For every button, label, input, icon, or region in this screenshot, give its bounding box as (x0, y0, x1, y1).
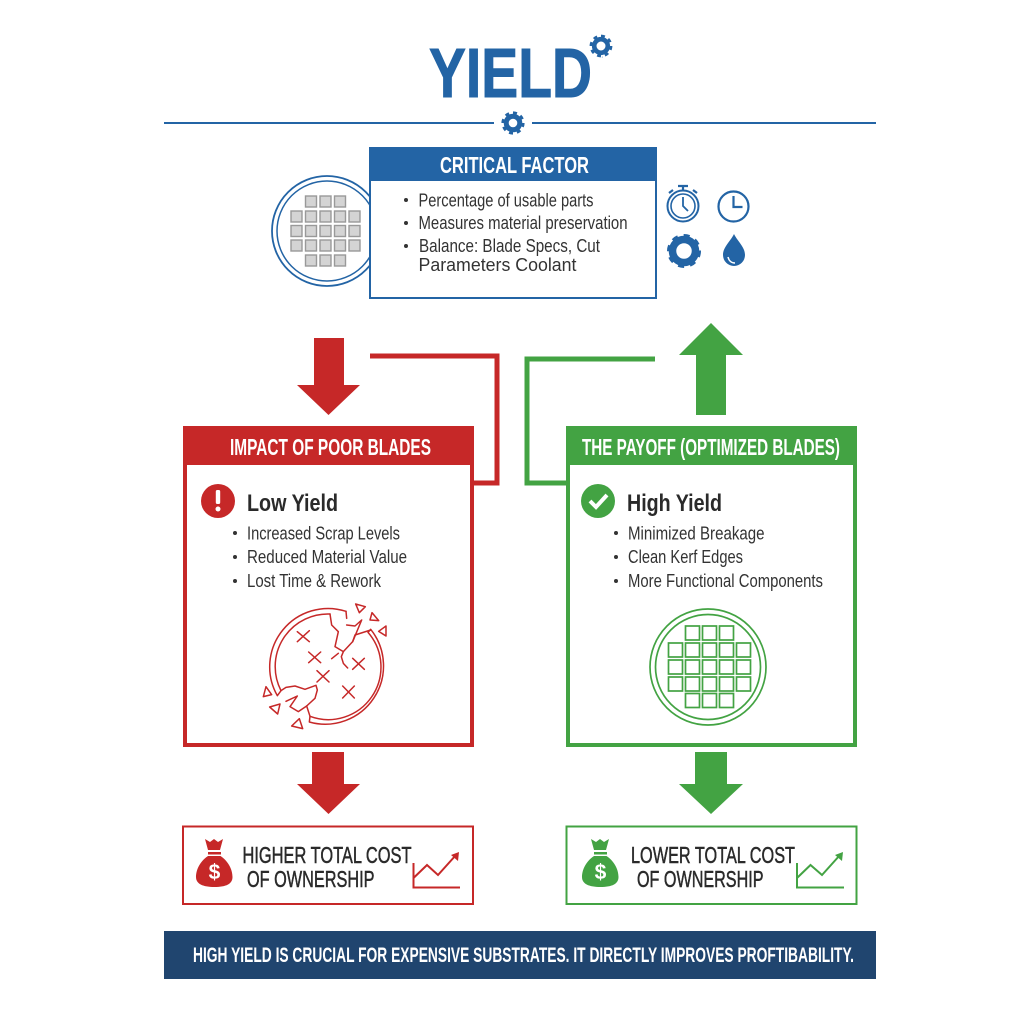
arrow: red down to left panel (297, 338, 360, 415)
text: higher total cost: HIGHER TOTAL COST (242, 842, 412, 868)
text: critical factor bullets: Percentage of usable parts (418, 190, 594, 210)
text: higher total cost (242, 842, 412, 892)
icon: red money bag: $ (209, 861, 221, 884)
icon: stopwatch (668, 186, 698, 222)
text: lower total cost: OF OWNERSHIP (637, 866, 764, 892)
title: YIELD: YIELD (429, 34, 592, 112)
icon: red money bag (196, 839, 232, 887)
arrow: green up from right panel (679, 323, 743, 415)
text: critical factor bullets: Balance: Blade Specs, Cut (419, 236, 600, 256)
icon: intact wafer (650, 609, 766, 725)
panel: critical factor (369, 147, 657, 298)
text: higher total cost: OF OWNERSHIP (247, 866, 374, 892)
text: low yield bullets: Increased Scrap Levels (247, 524, 400, 544)
text: low yield bullets: Reduced Material Value (247, 547, 407, 567)
icon: check (581, 484, 615, 518)
text: high yield bullets (614, 524, 823, 591)
icon: wafer with grey dies (272, 176, 382, 286)
subheading: high yield: High Yield (627, 490, 722, 517)
icon: green money bag: $ (595, 861, 607, 884)
panel: impact of poor blades (183, 426, 474, 745)
icon: title gear (591, 36, 611, 56)
icon: green money bag (582, 839, 618, 887)
arrow: red down to cost (297, 752, 360, 814)
panel: lower total cost (566, 826, 856, 904)
icon: broken wafer (263, 604, 386, 729)
text: critical factor bullets: Measures material preservation (418, 213, 628, 233)
icon: red trend chart (414, 852, 460, 888)
banner: conclusion (164, 931, 876, 979)
text: critical factor bullets (404, 190, 628, 275)
icon: green trend chart (797, 852, 844, 888)
connector: red line (370, 356, 497, 483)
panel: higher total cost (183, 826, 473, 904)
text: low yield bullets: Lost Time & Rework (247, 571, 382, 591)
text: critical factor bullets: Parameters Coolant (418, 255, 576, 275)
panel: the payoff (566, 426, 857, 745)
text: lower total cost (631, 842, 795, 892)
text: low yield bullets (233, 524, 407, 591)
text: high yield bullets: Clean Kerf Edges (628, 547, 743, 567)
heading: critical factor: CRITICAL FACTOR (440, 152, 589, 178)
text: lower total cost: LOWER TOTAL COST (631, 842, 795, 868)
icon: gear (669, 236, 699, 266)
heading: impact of poor blades: IMPACT OF POOR BLADES (230, 434, 431, 460)
heading: the payoff: THE PAYOFF (OPTIMIZED BLADES) (582, 434, 840, 460)
divider with gear (164, 113, 876, 133)
text: high yield bullets: More Functional Components (628, 571, 823, 591)
icon: clock (718, 192, 748, 222)
text: high yield bullets: Minimized Breakage (628, 524, 764, 544)
arrow: green down to cost (679, 752, 743, 814)
connector: green line (527, 359, 655, 483)
icon: warning (201, 484, 235, 518)
icon: coolant drop (723, 234, 745, 266)
subheading: low yield: Low Yield (247, 490, 338, 517)
